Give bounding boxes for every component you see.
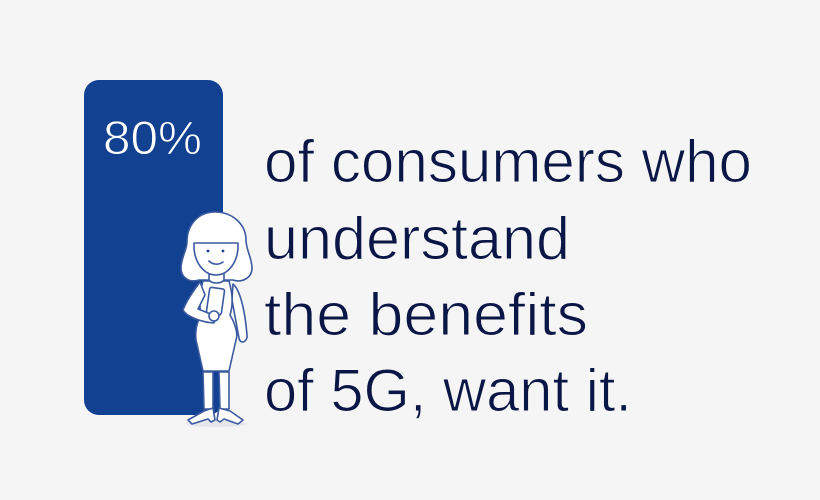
smile [209, 261, 223, 264]
neck [209, 272, 224, 283]
hair [181, 212, 252, 281]
left leg [203, 372, 213, 409]
phone [206, 287, 225, 315]
near arm [183, 282, 216, 323]
headline text: of 5G, want it. [264, 357, 632, 424]
headline text: of consumers who [264, 128, 752, 195]
icon: woman holding a phone [181, 212, 252, 427]
right leg [219, 372, 229, 409]
face [194, 243, 238, 275]
ground shadow [185, 421, 247, 427]
headline text: the benefits [264, 281, 588, 348]
far arm [232, 284, 247, 342]
right eye [222, 250, 224, 252]
left shoe [188, 408, 215, 424]
headline text: understand [264, 205, 570, 272]
left eye [207, 250, 209, 252]
right shoe [217, 408, 243, 424]
hand [209, 311, 219, 321]
percentage label: 80%: 80% [103, 111, 202, 164]
torso and dress [196, 281, 237, 371]
blue bar [84, 80, 223, 415]
headline text [264, 128, 752, 424]
